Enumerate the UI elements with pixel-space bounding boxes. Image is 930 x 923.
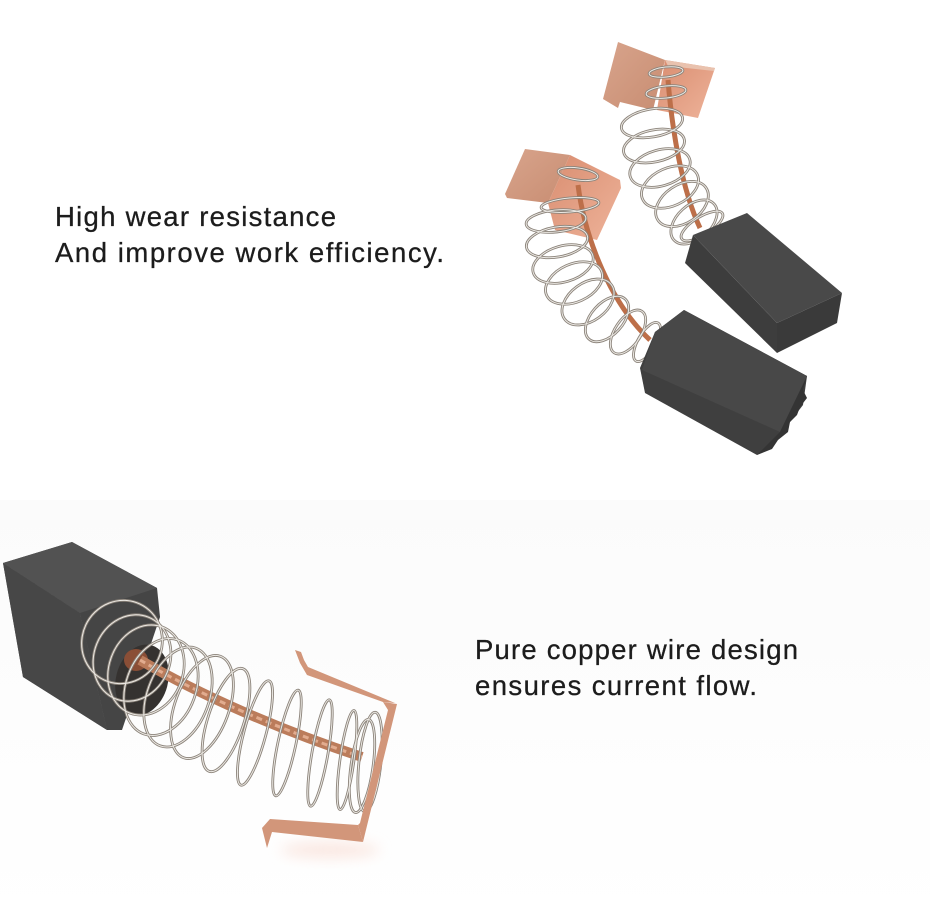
copper clip frame [262, 650, 397, 848]
lower carbon block [640, 310, 807, 455]
panel: bottom light background [0, 500, 930, 923]
heading: pure copper wire design: Pure copper wire design [475, 634, 798, 665]
heading: high wear resistance [55, 201, 444, 268]
red copper reflection [280, 842, 380, 858]
panel: top white background [0, 0, 930, 500]
upper brush spring [619, 65, 727, 253]
carbon block [3, 542, 160, 730]
spring coils [68, 587, 386, 814]
upper brush copper wire [668, 80, 700, 228]
copper spot inside spring [124, 649, 148, 671]
lower brush spring [524, 165, 666, 366]
upper carbon block [685, 213, 842, 353]
heading: pure copper wire design: ensures current flow. [475, 670, 757, 701]
braided copper wire [140, 660, 362, 757]
dark hollow in spring [108, 638, 176, 722]
photo: close-up of single carbon brush [3, 542, 397, 858]
upper brush copper clip [603, 42, 715, 118]
lower brush copper wire [578, 185, 650, 340]
heading: high wear resistance: High wear resistance [55, 201, 336, 232]
heading: pure copper wire design [475, 634, 798, 701]
heading: high wear resistance: And improve work efficiency. [55, 237, 444, 268]
photo: two carbon brushes with springs [505, 42, 842, 455]
lower brush copper clip [505, 149, 621, 240]
